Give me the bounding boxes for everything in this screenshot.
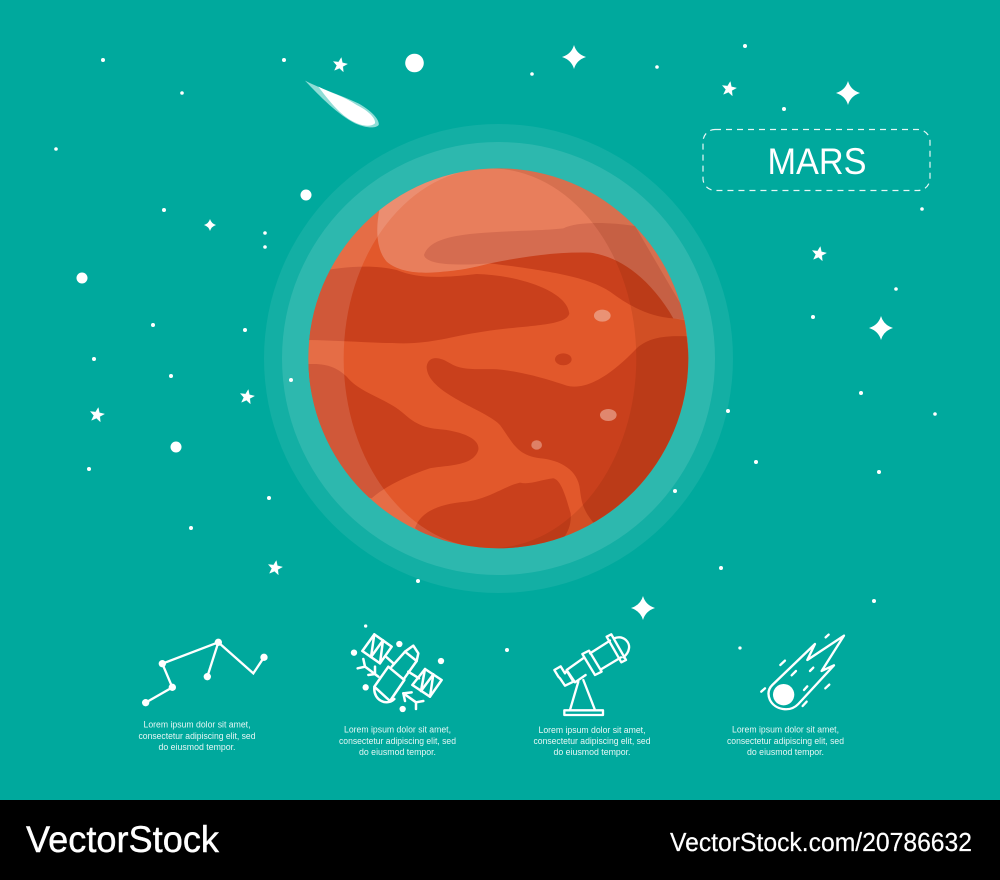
- atmosphere halo: [264, 124, 733, 593]
- five-pointed stars: [89, 56, 827, 575]
- footer logo text: VectorStock: [26, 819, 219, 860]
- title: MARS: [768, 141, 866, 182]
- caption: telescope: Lorem ipsum dolor sit amet,: [538, 725, 646, 735]
- planet base: [308, 168, 688, 548]
- footer bar: [0, 800, 1000, 880]
- shooting comet: [305, 81, 379, 127]
- left light crescent: [308, 172, 460, 544]
- caption: telescope: [534, 725, 650, 757]
- caption: meteor: Lorem ipsum dolor sit amet,: [732, 724, 839, 734]
- caption: satellite: Lorem ipsum dolor sit amet,: [344, 724, 451, 734]
- craters: [594, 310, 611, 322]
- polar cap: [377, 163, 695, 353]
- caption: satellite: consectetur adipiscing elit, sed: [339, 736, 456, 746]
- caption: telescope: consectetur adipiscing elit, sed: [534, 736, 650, 746]
- icon: satellite: [351, 624, 444, 712]
- central dark region: [427, 336, 695, 523]
- caption: constellation: Lorem ipsum dolor sit amet,: [144, 720, 250, 730]
- title box: [703, 130, 930, 190]
- large round stars: [76, 54, 424, 452]
- caption: meteor: consectetur adipiscing elit, sed: [727, 736, 844, 746]
- planet Mars: [308, 168, 688, 548]
- four-pointed sparkle stars: [204, 45, 893, 620]
- caption: meteor: do eiusmod tempor.: [747, 747, 824, 757]
- bottom dark region: [415, 478, 571, 555]
- caption: constellation: consectetur adipiscing elit, sed: [138, 731, 256, 741]
- right shadow crescent: [498, 168, 688, 548]
- caption: constellation: [138, 720, 256, 752]
- caption: meteor: [727, 724, 844, 757]
- icon: constellation: [142, 639, 268, 706]
- caption: satellite: do eiusmod tempor.: [359, 747, 436, 757]
- caption: satellite: [339, 724, 456, 757]
- caption: telescope: do eiusmod tempor.: [554, 747, 630, 757]
- upper dark region: [300, 267, 569, 343]
- icon: telescope: [554, 634, 629, 715]
- footer image id: VectorStock.com/20786632: [670, 827, 972, 857]
- small background stars: [54, 44, 937, 652]
- caption: constellation: do eiusmod tempor.: [158, 742, 236, 752]
- upper right dark band: [424, 223, 690, 320]
- icon: meteor: [738, 635, 844, 709]
- lower left dark region: [300, 364, 478, 498]
